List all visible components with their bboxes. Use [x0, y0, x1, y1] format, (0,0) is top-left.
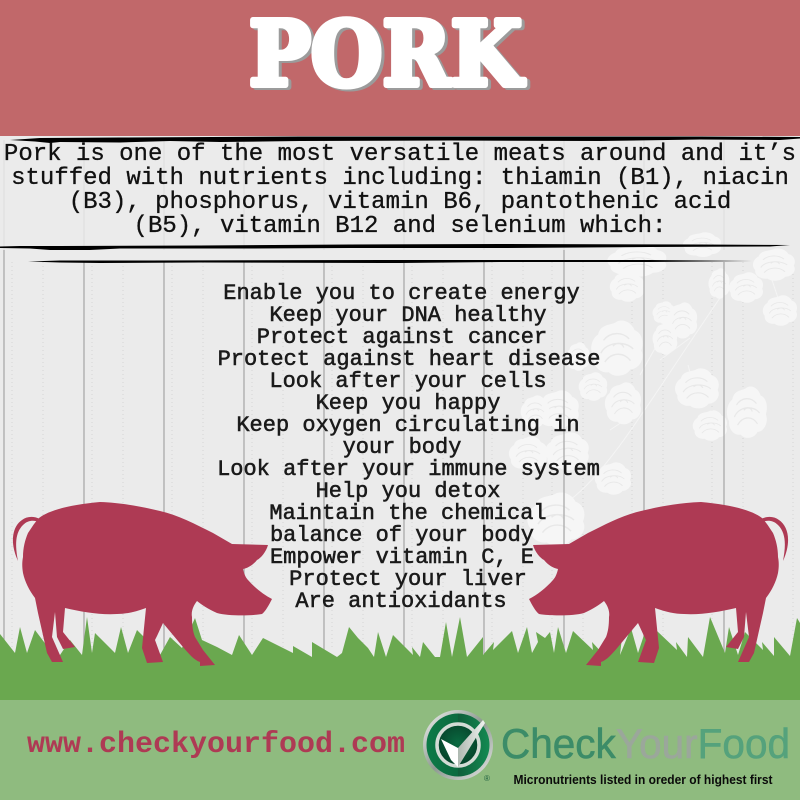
- intro text: [4, 141, 796, 240]
- title: PORK: PORK: [249, 1, 525, 106]
- benefits list: Enable you to create energy: [223, 281, 580, 306]
- right pig: [529, 502, 788, 666]
- brush stroke: top: [10, 136, 800, 143]
- website address: www.checkyourfood.com: [27, 728, 405, 762]
- logo wordmark: CheckYourFood: [501, 720, 790, 767]
- footnote: Micronutrients listed in oreder of highest first: [514, 773, 773, 787]
- brush stroke: middle: [0, 244, 790, 250]
- benefits list: your body: [343, 435, 461, 460]
- fence boards: [4, 140, 793, 650]
- benefits list: balance of your body: [270, 523, 534, 548]
- brush stroke: lower: [28, 260, 752, 263]
- benefits list: Help you detox: [316, 479, 500, 504]
- benefits list: Protect against heart disease: [218, 347, 600, 372]
- intro text: stuffed with nutrients including: thiamin (B1), niacin: [11, 165, 789, 192]
- logo: check mark badge: [423, 710, 493, 780]
- intro text: Pork is one of the most versatile meats around and it’s: [4, 141, 796, 168]
- benefits list: [217, 281, 600, 614]
- benefits list: Keep your DNA healthy: [269, 303, 547, 328]
- left pig body: [22, 502, 272, 666]
- footer band: [0, 700, 800, 800]
- benefits list: Protect your liver: [289, 567, 527, 592]
- benefits list: Empower vitamin C, E: [270, 545, 534, 570]
- benefits list: Look after your immune system: [217, 457, 600, 482]
- grass: [0, 617, 800, 700]
- benefits list: Protect against cancer: [257, 325, 547, 350]
- right pig tail: [761, 517, 788, 561]
- fence posts: [4, 250, 724, 660]
- right pig body: [529, 502, 779, 666]
- intro text: (B5), vitamin B12 and selenium which:: [134, 213, 666, 240]
- intro text: (B3), phosphorus, vitamin B6, pantothenic acid: [69, 189, 731, 216]
- title: PORK: PORK: [252, 3, 528, 108]
- benefits list: Look after your cells: [269, 369, 547, 394]
- decorative white roses: [509, 232, 797, 546]
- left pig: [13, 502, 272, 666]
- benefits list: Keep you happy: [316, 391, 500, 416]
- left pig tail: [13, 517, 40, 561]
- benefits list: Keep oxygen circulating in: [236, 413, 580, 438]
- benefits list: Maintain the chemical: [269, 501, 547, 526]
- registered mark: ®: [484, 774, 490, 783]
- header band: [0, 0, 800, 136]
- benefits list: Are antioxidants: [295, 589, 507, 614]
